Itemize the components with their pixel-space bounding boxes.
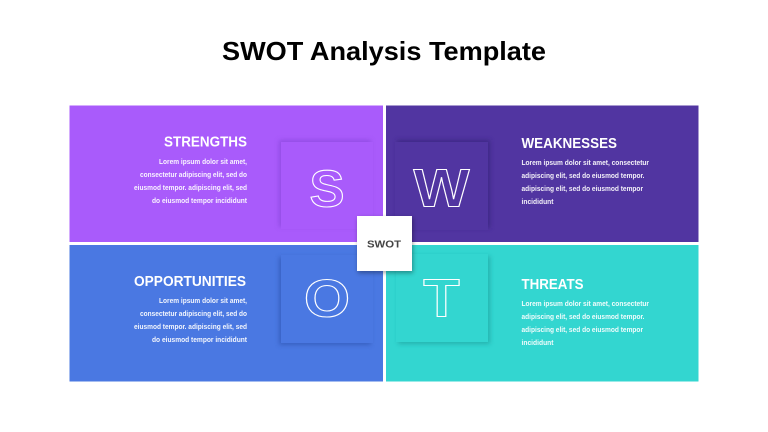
body text: threats	[522, 299, 649, 347]
body text: weaknesses: incididunt	[522, 197, 554, 206]
letter tile: W	[395, 140, 490, 230]
center badge: SWOT	[357, 216, 413, 273]
body text: threats: incididunt	[522, 338, 554, 347]
panel: weaknesses	[386, 106, 698, 242]
letter tile: S	[279, 140, 373, 229]
body text: weaknesses: adipiscing elit, sed do eiusmod tempor.	[522, 171, 644, 180]
heading: strengths: STRENGTHS	[164, 134, 247, 150]
heading: opportunities: OPPORTUNITIES	[134, 274, 246, 290]
body text: strengths	[134, 157, 247, 205]
panel: threats	[386, 245, 698, 382]
panel: strengths	[70, 106, 383, 242]
heading: threats: THREATS	[522, 277, 584, 293]
heading: weaknesses: WEAKNESSES	[522, 136, 617, 152]
body text: threats: adipiscing elit, sed do eiusmod tempor	[522, 325, 643, 334]
body text: weaknesses	[522, 158, 649, 206]
letter tile: O: O	[304, 270, 350, 328]
body text: weaknesses: adipiscing elit, sed do eiusmod tempor	[522, 184, 643, 193]
body text: threats: adipiscing elit, sed do eiusmod tempor.	[522, 312, 644, 321]
body text: opportunities: Lorem ipsum dolor sit amet,	[159, 296, 247, 305]
title: SWOT Analysis Template	[222, 36, 546, 66]
panel: opportunities	[70, 245, 383, 382]
center badge: SWOT: SWOT	[367, 238, 402, 250]
body text: strengths: eiusmod tempor. adipiscing elit, sed	[134, 183, 247, 192]
body text: strengths: do eiusmod tempor incididunt	[152, 196, 247, 205]
letter tile: S: S	[310, 160, 344, 218]
body text: opportunities: consectetur adipiscing elit, sed do	[140, 309, 247, 318]
letter tile: O	[279, 255, 373, 345]
body text: opportunities: eiusmod tempor. adipiscing elit, sed	[134, 322, 247, 331]
body text: opportunities: do eiusmod tempor incididunt	[152, 335, 247, 344]
body text: weaknesses: Lorem ipsum dolor sit amet, consectetur	[522, 158, 649, 167]
body text: opportunities	[134, 296, 247, 344]
letter tile: W: W	[414, 158, 470, 218]
letter tile: T: T	[423, 268, 460, 328]
body text: strengths: Lorem ipsum dolor sit amet,	[159, 157, 247, 166]
body text: strengths: consectetur adipiscing elit, sed do	[140, 170, 247, 179]
body text: threats: Lorem ipsum dolor sit amet, consectetur	[522, 299, 649, 308]
letter tile: T	[396, 254, 490, 344]
